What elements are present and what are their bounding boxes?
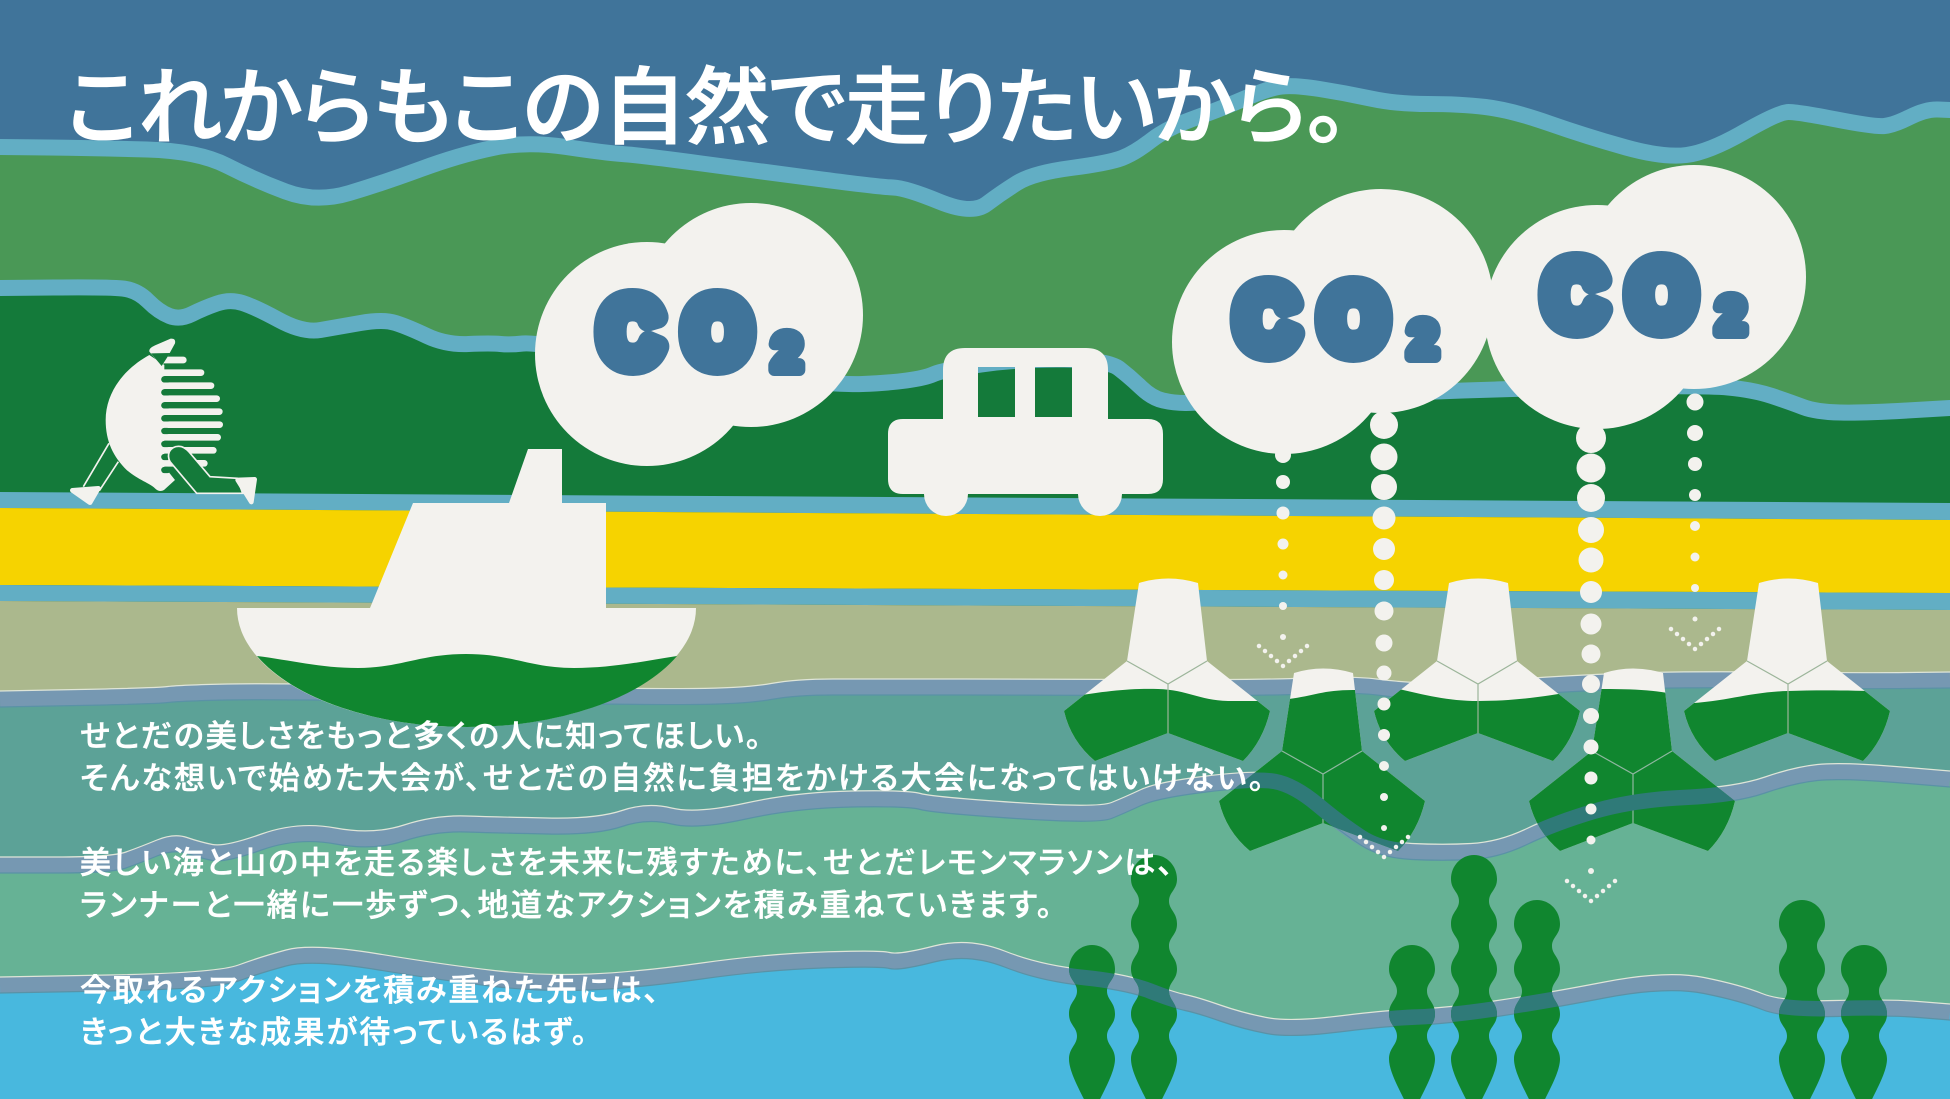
sea band: deep blue water	[0, 942, 1950, 1099]
text block: body copy: そんな想いで始めた大会が、せとだの自然に負担をかける大会になってはいけない。	[80, 761, 1264, 796]
CO2 dots falling, column 3	[1567, 423, 1615, 901]
icon: CO2 cloud, ship: C	[600, 280, 661, 383]
title: これからもこの自然で走りたいから。	[66, 61, 1348, 155]
icon: CO2 cloud, right: C	[1544, 243, 1605, 346]
CO2 dots falling, column 1	[1259, 447, 1307, 666]
icon: CO2 cloud, right: O	[1629, 243, 1694, 346]
wave line passing over front tetrapods	[1234, 772, 1734, 851]
road: yellow running course with blue edges	[0, 492, 1950, 720]
text block: body copy: 今取れるアクションを積み重ねた先には、	[80, 973, 659, 1008]
CO2 dots falling, column 4	[1671, 394, 1719, 649]
background: green mountains	[0, 0, 1950, 560]
icon: tetrapod 4, front	[1219, 668, 1425, 851]
text block: body copy: せとだの美しさをもっと多くの人に知ってほしい。	[80, 719, 761, 754]
icon: CO2 cloud, ship	[535, 203, 863, 466]
icon: tetrapod 3	[1684, 578, 1890, 761]
icon: runner	[72, 339, 255, 503]
text block: body copy: ランナーと一緒に一歩ずつ、地道なアクションを積み重ねていきます。	[80, 888, 1052, 923]
icon: CO2 cloud, car: 2	[1408, 311, 1437, 369]
icon: ship	[237, 449, 696, 727]
wave line passing over seaweed	[1069, 968, 1887, 1026]
icon: CO2 cloud, car	[1172, 189, 1493, 454]
background: near mountain ridge	[0, 287, 1950, 700]
text block: body copy: きっと大きな成果が待っているはず。	[80, 1015, 587, 1050]
sea band: teal shallows	[0, 672, 1950, 900]
icon: tetrapod 2	[1374, 578, 1580, 761]
text block: body copy	[80, 719, 1264, 1050]
CO2 dots falling, column 2	[1360, 411, 1408, 857]
icon: car	[888, 348, 1163, 516]
seaweed clusters	[1069, 855, 1887, 1099]
background: sky with ridge line	[0, 0, 1950, 209]
icon: CO2 cloud, right: 2	[1716, 287, 1745, 345]
icon: CO2 cloud, ship: O	[685, 280, 750, 383]
icon: tetrapod 1	[1064, 578, 1270, 761]
icon: CO2 cloud, car: O	[1321, 267, 1386, 370]
icon: CO2 cloud, right	[1485, 165, 1806, 429]
icon: CO2 cloud, car: C	[1236, 267, 1297, 370]
text block: body copy: 美しい海と山の中を走る楽しさを未来に残すために、せとだレモンマラソンは、	[80, 846, 1173, 880]
icon: CO2 cloud, ship: 2	[772, 324, 801, 382]
icon: tetrapod 5, front	[1529, 668, 1735, 851]
sea band: green shallows	[0, 764, 1950, 1050]
